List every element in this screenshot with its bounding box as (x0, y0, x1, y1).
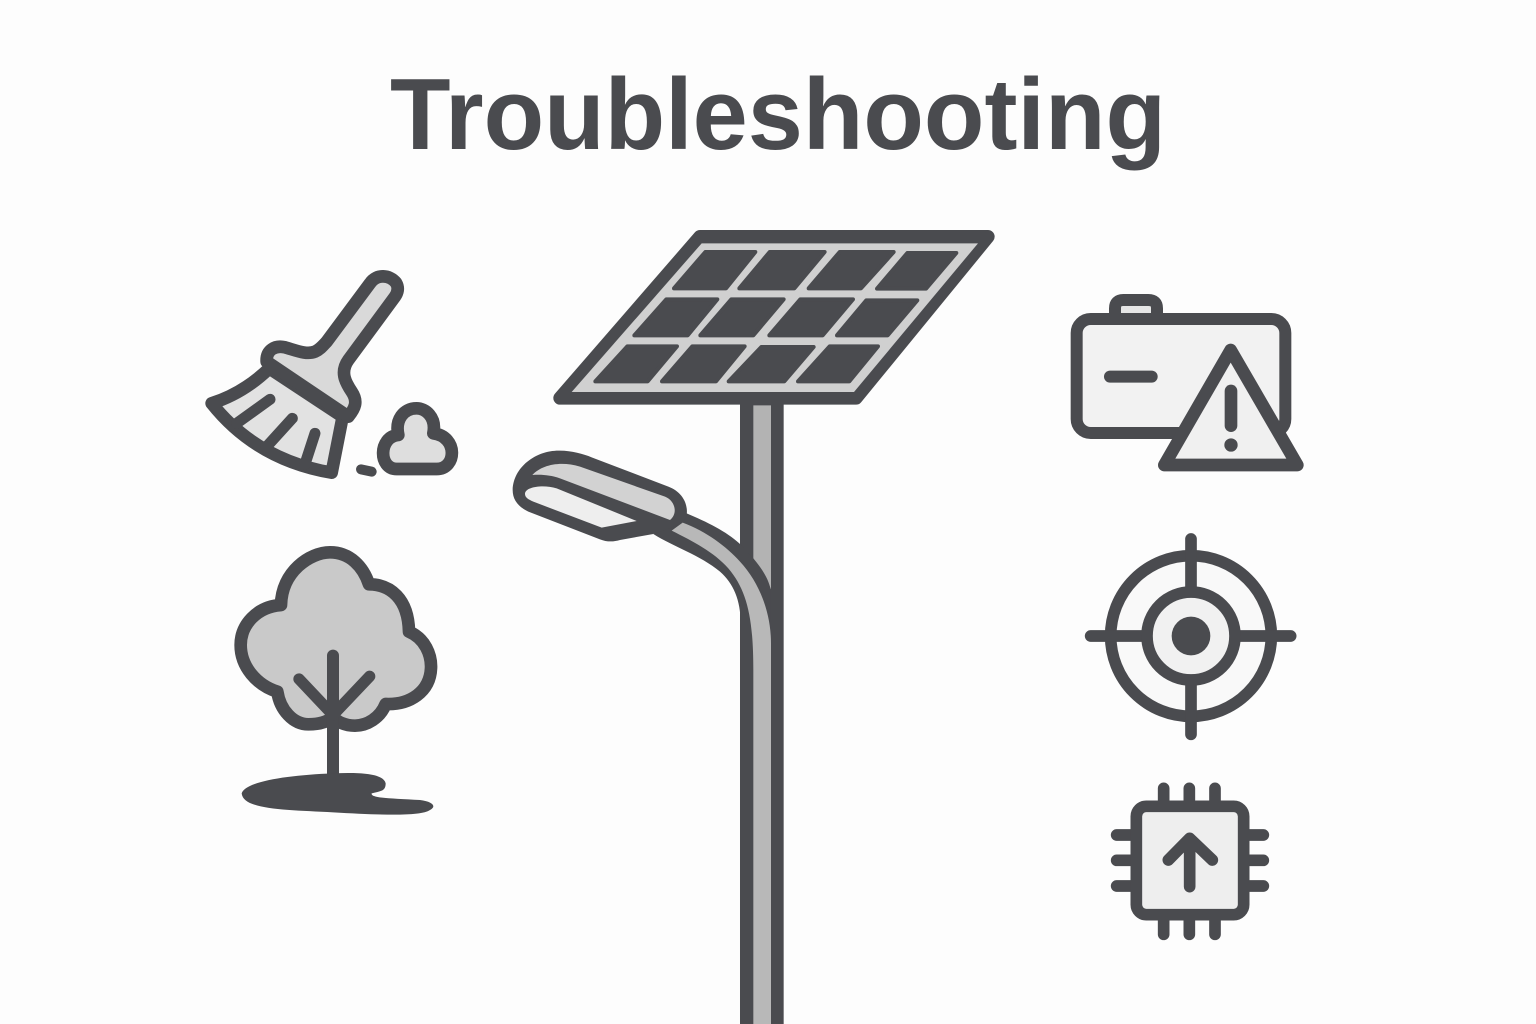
solar panel (560, 237, 988, 398)
outer ring (1111, 556, 1271, 716)
chip body (1136, 806, 1244, 915)
broom handle (267, 276, 398, 417)
center dot (1172, 617, 1210, 655)
solar street light (513, 237, 988, 1024)
dust speck (361, 469, 372, 472)
lamp head (513, 451, 687, 541)
chip pins (1117, 788, 1263, 934)
icon: tree with shadow (241, 552, 433, 815)
title: Troubleshooting (390, 59, 1166, 171)
panel frame (560, 237, 988, 398)
tree canopy (241, 552, 431, 726)
up arrow (1168, 838, 1212, 887)
warning triangle (1164, 350, 1297, 465)
dust pile (383, 408, 452, 469)
minus sign (1110, 359, 1152, 395)
icon: target crosshair (1091, 539, 1291, 734)
inner ring (1147, 592, 1235, 680)
icon: battery warning (1077, 300, 1297, 465)
pole (740, 403, 784, 1024)
crosshair lines (1091, 539, 1291, 734)
bristle lines (237, 399, 315, 464)
broom bristles (212, 368, 343, 473)
icon: chip firmware update (1117, 788, 1263, 934)
solar cells (595, 252, 956, 381)
ground shadow (242, 773, 433, 815)
trunk and branches (299, 656, 370, 778)
icon: broom sweeping dust (212, 276, 452, 473)
battery terminal (1115, 300, 1157, 319)
exclamation mark (1224, 391, 1238, 452)
battery body (1077, 319, 1285, 433)
curved lamp arm (653, 513, 771, 1024)
